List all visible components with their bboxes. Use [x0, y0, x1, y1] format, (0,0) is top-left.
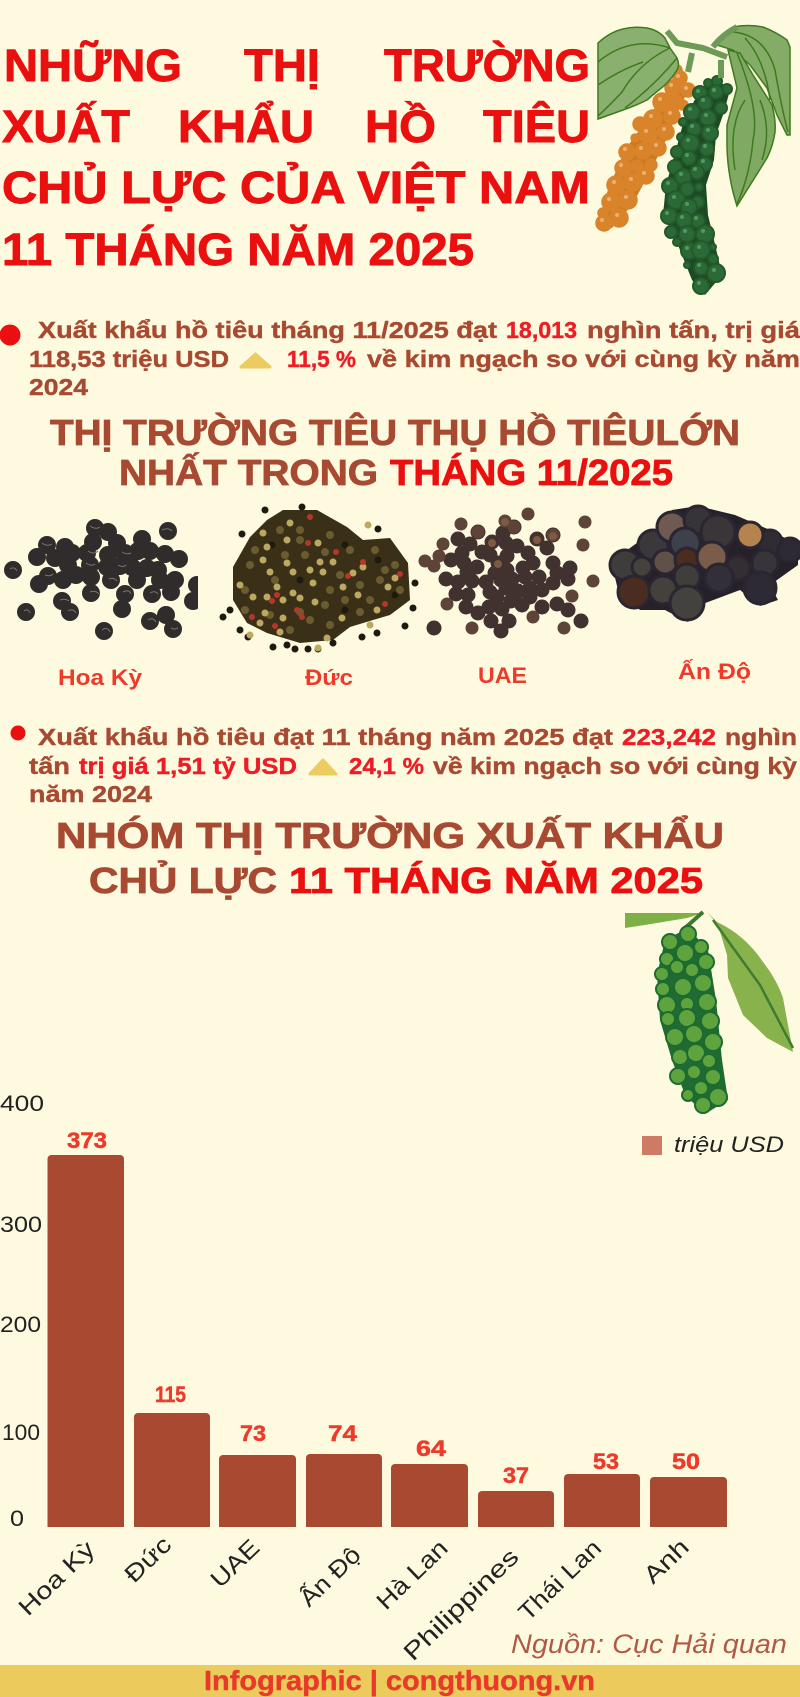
bullet paragraph: 11 months 2025: 24,1 %	[349, 753, 424, 779]
bullet dot	[10, 726, 26, 740]
label: Đức: Đức	[305, 665, 353, 690]
stems	[667, 27, 737, 78]
title	[2, 40, 590, 275]
legend	[642, 1132, 784, 1157]
title: TIÊU	[483, 101, 590, 152]
bullet paragraph: November 2025: 118,53 triệu USD	[29, 346, 229, 372]
label: Ấn Độ: Ấn Độ	[678, 659, 751, 684]
left leaf	[598, 27, 678, 119]
heading: largest markets in November	[50, 411, 740, 493]
panel: Hoa Kỳ peppercorns	[10, 526, 197, 632]
bullet paragraph: November 2025	[0, 317, 800, 400]
bullet paragraph: 11 months 2025: tấn	[29, 753, 70, 779]
value labels: 115	[155, 1382, 186, 1407]
x axis labels	[13, 1531, 695, 1666]
title: XUẤT	[2, 101, 130, 152]
heading: key export markets	[56, 814, 724, 901]
y axis labels	[0, 1091, 44, 1531]
bullet paragraph: November 2025: Xuất khẩu hồ tiêu tháng 11/2025 đạt	[38, 317, 497, 343]
label: UAE: UAE	[478, 663, 527, 688]
green pepper spike	[661, 76, 732, 295]
title: CHỦ LỰC CỦA VIỆT NAM	[2, 162, 590, 213]
x axis labels: Ấn Độ	[294, 1541, 366, 1612]
source note: Nguồn: Cục Hải quan	[511, 1629, 787, 1659]
x axis labels: Đức	[119, 1531, 177, 1588]
title: THỊ	[244, 40, 320, 91]
footer band: Infographic | congthuong.vn	[204, 1665, 595, 1696]
x axis labels: Hoa Kỳ	[13, 1536, 101, 1621]
title: 11 THÁNG NĂM 2025	[2, 224, 474, 275]
bullet dot	[0, 324, 20, 346]
orange pepper spike	[596, 65, 695, 231]
heading: largest markets in November: THÁNG 11/2025	[390, 452, 673, 493]
bullet paragraph: November 2025: về kim ngạch so với cùng kỳ năm	[367, 346, 800, 372]
heading: key export markets: CHỦ LỰC	[89, 859, 277, 901]
value labels: 73	[240, 1421, 266, 1446]
value labels: 373	[67, 1128, 107, 1153]
bullet paragraph: November 2025: 11,5 %	[287, 346, 356, 372]
bullet paragraph: 11 months 2025: trị giá 1,51 tỷ USD	[79, 753, 297, 779]
y axis labels: 400	[0, 1091, 44, 1116]
icon: increase triangle	[241, 354, 270, 367]
y axis labels: 0	[10, 1506, 24, 1531]
value labels: 74	[328, 1421, 358, 1446]
icon: increase triangle	[310, 760, 336, 774]
bullet paragraph: November 2025: nghìn tấn, trị giá	[587, 317, 800, 343]
legend: triệu USD	[674, 1132, 784, 1157]
value labels	[67, 1128, 700, 1488]
y axis labels: 100	[2, 1420, 40, 1445]
title: HỒ	[365, 101, 436, 152]
label: Hoa Kỳ: Hoa Kỳ	[58, 665, 143, 690]
heading: key export markets: NHÓM THỊ TRƯỜNG XUẤT KHẨU	[56, 814, 724, 856]
icon: pepper branch with orange and green spikes	[596, 26, 790, 295]
x axis labels: Philippines	[398, 1543, 524, 1666]
bullet paragraph: 11 months 2025: về kim ngạch so với cùng kỳ	[433, 753, 797, 779]
bullet paragraph: 11 months 2025: 223,242	[622, 724, 716, 750]
x axis labels: Anh	[638, 1534, 695, 1589]
title: TRƯỜNG	[384, 40, 590, 91]
title: KHẨU	[178, 101, 314, 152]
title: NHỮNG	[4, 40, 182, 91]
panel: UAE peppercorns	[425, 514, 593, 631]
bullet paragraph: 11 months 2025: năm 2024	[29, 781, 152, 807]
panel: Ấn Độ large peppercorns	[610, 506, 800, 622]
x axis labels: Thái Lan	[513, 1535, 607, 1626]
value labels: 64	[416, 1436, 447, 1461]
bar chart: export value by market	[0, 1091, 784, 1666]
x axis labels: UAE	[205, 1534, 265, 1593]
heading: key export markets: 11 THÁNG NĂM 2025	[289, 860, 703, 901]
value labels: 53	[593, 1449, 619, 1474]
value labels: 37	[503, 1463, 529, 1488]
bullet paragraph: 11 months 2025	[10, 724, 797, 807]
y axis labels: 200	[0, 1312, 41, 1337]
bullet paragraph: November 2025: 18,013	[506, 317, 577, 343]
heading: largest markets in November: NHẤT TRONG	[119, 452, 378, 493]
bullet paragraph: 11 months 2025: Xuất khẩu hồ tiêu đạt 11 tháng năm 2025 đạt	[38, 724, 613, 750]
icon: green pepper sprig	[625, 912, 793, 1114]
bullet paragraph: November 2025: 2024	[29, 374, 88, 400]
y axis labels: 300	[0, 1212, 42, 1237]
panel: Đức mixed peppercorn pile	[223, 507, 415, 649]
value labels: 50	[672, 1449, 700, 1474]
bullet paragraph: 11 months 2025: nghìn	[725, 724, 797, 750]
right leaves	[717, 26, 790, 206]
x axis labels: Hà Lan	[371, 1535, 453, 1615]
heading: largest markets in November: THỊ TRƯỜNG TIÊU THỤ HỒ TIÊULỚN	[50, 411, 740, 453]
footer band	[0, 1665, 800, 1697]
bars	[48, 1155, 727, 1527]
